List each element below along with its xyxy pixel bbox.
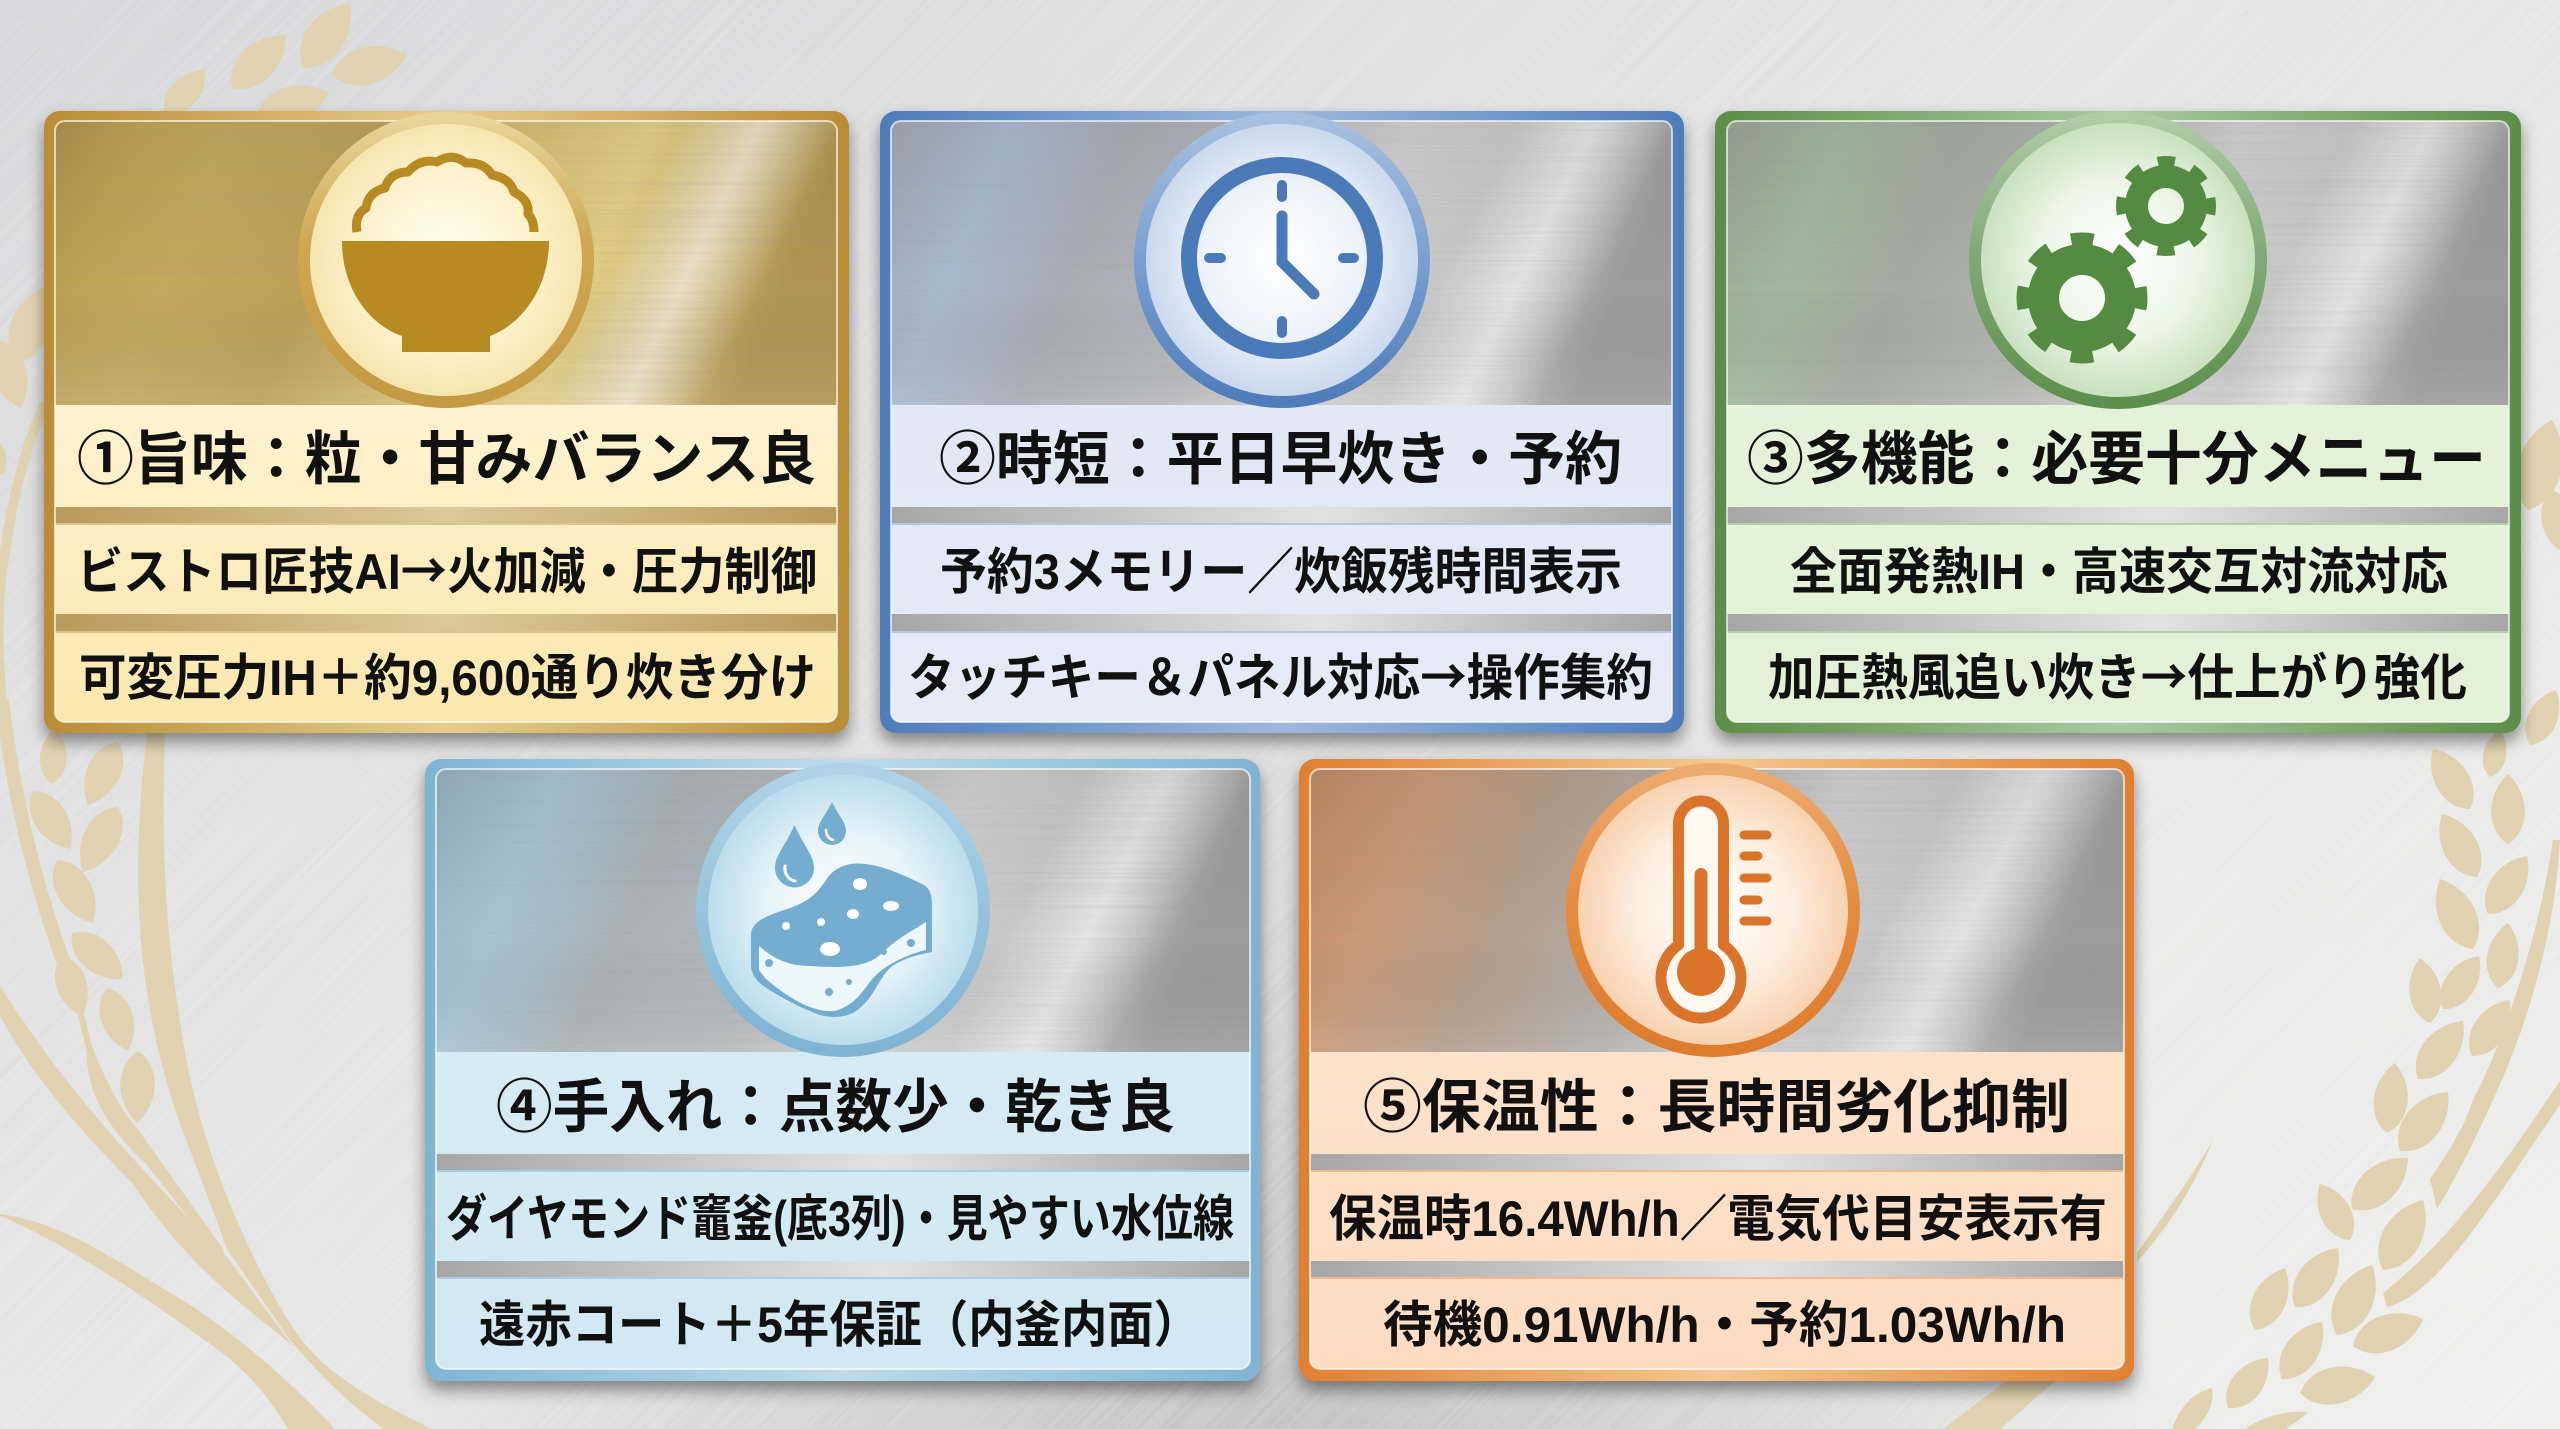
panel: 2 time saving — [880, 111, 1684, 733]
heading: ⑤保温性：長時間劣化抑制 — [1363, 1075, 2070, 1140]
card frame — [1715, 111, 2521, 733]
panel: 4 maintenance — [425, 759, 1260, 1381]
lower right stalk — [1943, 728, 2560, 1429]
heading: ①旨味：粒・甘みバランス良 — [77, 427, 816, 492]
panel: 1 umami — [44, 111, 849, 733]
left edge grains and stem — [0, 281, 62, 700]
panel: 5 heat retention — [1299, 759, 2134, 1381]
icon: sponge and water drops — [702, 769, 984, 1051]
line 1: 予約3メモリー／炊飯残時間表示 — [940, 544, 1622, 600]
heading: ④手入れ：点数少・乾き良 — [496, 1075, 1175, 1140]
icon: clock — [1140, 118, 1424, 402]
heading: ③多機能：必要十分メニュー — [1747, 427, 2486, 492]
panel: 3 multi-function — [1715, 111, 2521, 733]
card frame — [1299, 759, 2134, 1381]
heading: ②時短：平日早炊き・予約 — [939, 427, 1622, 492]
top left grains — [154, 0, 412, 132]
lower left stalk — [0, 700, 433, 1429]
panel body — [1727, 121, 2509, 722]
card frame — [880, 111, 1684, 733]
card frame — [425, 759, 1260, 1381]
line 2: 加圧熱風追い炊き→仕上がり強化 — [1768, 638, 2467, 710]
icon: rice bowl — [304, 118, 588, 402]
panel body — [55, 121, 837, 722]
line 2: 待機0.91Wh/h・予約1.03Wh/h — [1383, 1297, 2066, 1353]
line 2: 遠赤コート＋5年保証（内釜内面） — [479, 1297, 1200, 1353]
line 1: 保温時16.4Wh/h／電気代目安表示有 — [1329, 1191, 2107, 1247]
right edge grains behind card 3 — [2506, 414, 2560, 751]
line 2: 可変圧力IH＋約9,600通り炊き分け — [79, 650, 816, 706]
line 1: 全面発熱IH・高速交互対流対応 — [1790, 544, 2448, 600]
panel body — [436, 769, 1250, 1369]
card frame — [44, 111, 849, 733]
line 1: ダイヤモンド竈釜(底3列)・見やすい水位線 — [446, 1191, 1234, 1247]
panel body — [1310, 769, 2124, 1369]
line 1: ビストロ匠技AI→火加減・圧力制御 — [77, 532, 817, 604]
line 2: タッチキー＆パネル対応→操作集約 — [908, 638, 1653, 710]
icon: thermometer — [1572, 769, 1854, 1051]
panel body — [891, 121, 1672, 722]
icon: gears — [1975, 117, 2261, 403]
